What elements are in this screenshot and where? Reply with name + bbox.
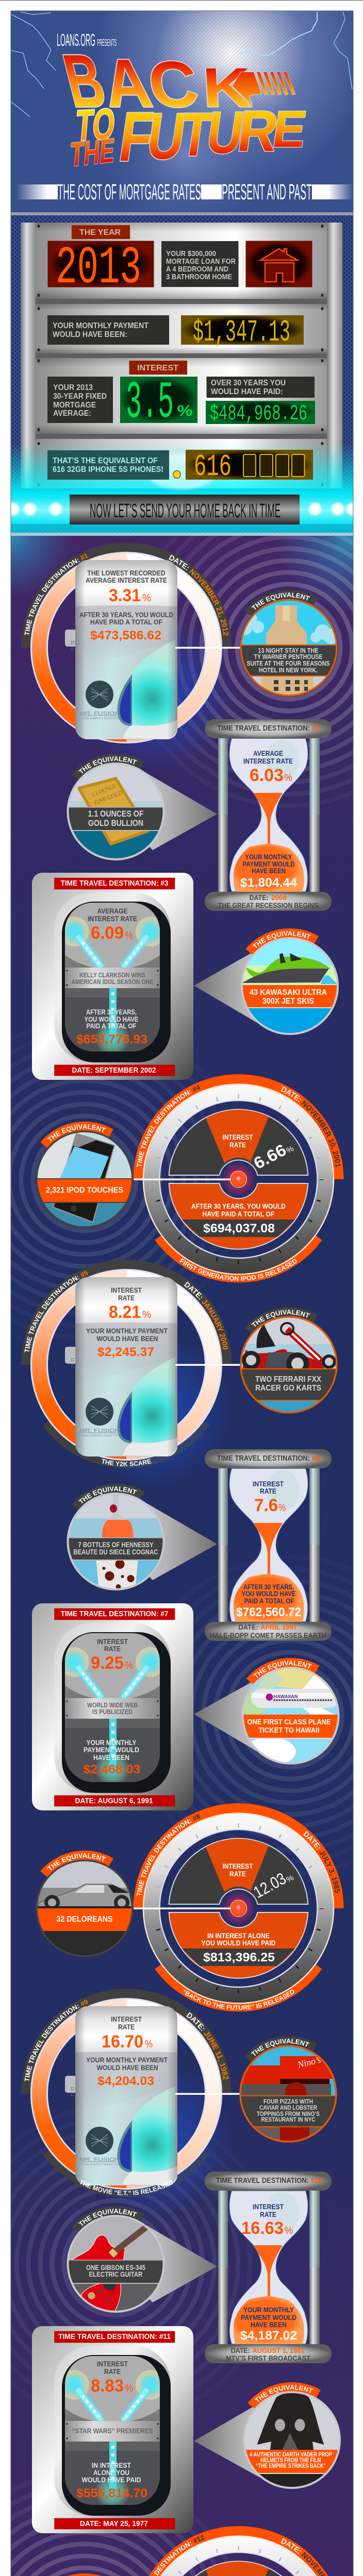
destination 6: hourglass: INTEREST bbox=[253, 1480, 284, 1488]
equivalent 2: gold bullion bbox=[67, 754, 165, 860]
destination 5: Mr. Fusion: WOULD HAVE BEEN bbox=[97, 1334, 158, 1343]
display: interest rate: % bbox=[177, 402, 193, 419]
equivalent 8: deloreans: 32 DELOREANS bbox=[57, 1915, 113, 1924]
equivalent 11: darth vader helmets: 4 AUTHENTIC DARTH VADER PROP bbox=[250, 2452, 332, 2458]
destination 10: hourglass: DATE: bbox=[231, 2346, 250, 2354]
tag: interest bbox=[129, 361, 187, 375]
destination 5: Mr. Fusion: MR. FUSION bbox=[79, 1428, 120, 1434]
destination 2: hourglass: THE GREAT RECESSION BEGINS bbox=[218, 901, 318, 909]
text block: over 30 years: OVER 30 YEARS YOU bbox=[211, 379, 286, 387]
title: Back to the Future: TO bbox=[74, 99, 117, 150]
destination 4: clock: DATE: NOVEMBER 10, 2001 bbox=[280, 1086, 341, 1167]
tag: the year: THE YEAR bbox=[79, 228, 121, 237]
destination 9: Mr. Fusion: 16.70 bbox=[102, 2032, 143, 2052]
destination 10: hourglass: PAYMENT WOULD bbox=[241, 2313, 296, 2321]
destination 4: clock: AFTER 30 YEARS, YOU WOULD bbox=[191, 1202, 286, 1210]
destination 4: clock: INTEREST bbox=[223, 1133, 253, 1141]
destination 10: hourglass: AUGUST 1, 1981 bbox=[253, 2346, 305, 2354]
destination 10: hourglass: YOUR MONTHLY bbox=[243, 2306, 294, 2314]
destination 2: hourglass bbox=[205, 719, 332, 911]
text block: monthly payment: YOUR MONTHLY PAYMENT bbox=[53, 321, 148, 330]
equivalent 9: pizzas: RESTAURANT IN NYC bbox=[261, 2117, 316, 2123]
text block: over 30 years bbox=[206, 377, 315, 398]
destination 6: hourglass: PAID A TOTAL OF bbox=[244, 1597, 294, 1605]
banner: now let's send your home back in time bbox=[70, 495, 300, 524]
display: interest rate: 3.5 bbox=[126, 374, 174, 433]
equivalent 3: jet skis: 300X JET SKIS bbox=[262, 997, 314, 1006]
destination 2: hourglass: $1,804.44 bbox=[240, 876, 298, 890]
equivalent 10: guitar: THE EQUIVALENT bbox=[78, 2209, 137, 2226]
destination 9: Mr. Fusion: THE MOVIE “E.T.” IS RELEASED bbox=[80, 2179, 173, 2195]
destination 7: flux capacitor: PAYMENT WOULD bbox=[84, 1745, 139, 1754]
destination 1: Mr. Fusion: MR. FUSION bbox=[79, 711, 120, 717]
equivalent 1: hotel: TY WARNER PENTHOUSE bbox=[254, 653, 323, 660]
destination 9: Mr. Fusion: 11 12 bbox=[70, 2087, 75, 2097]
destination 6: hourglass: $762,560.72 bbox=[236, 1605, 301, 1619]
equivalent 7: plane ticket: ONE FIRST CLASS PLANE bbox=[248, 1718, 331, 1726]
equivalent 9: pizzas: FOUR PIZZAS WITH bbox=[263, 2099, 313, 2105]
destination 2: hourglass: % bbox=[284, 772, 292, 784]
destination 4: clock: 6.66 bbox=[251, 1140, 289, 1173]
presenter line bbox=[57, 30, 117, 49]
equivalent 7: plane ticket bbox=[241, 1658, 339, 1765]
destination 1: Mr. Fusion: 11 12 bbox=[70, 640, 75, 651]
destination 6: hourglass: YOU WOULD HAVE bbox=[241, 1589, 296, 1598]
destination 2: hourglass: AVERAGE bbox=[253, 749, 283, 757]
destination 7: flux capacitor: HAVE BEEN bbox=[93, 1753, 129, 1761]
destination 5: Mr. Fusion: TIME TRAVEL DESTINATION: #5 bbox=[25, 1270, 88, 1352]
destination 7: flux capacitor: $2,468.03 bbox=[84, 1762, 140, 1776]
equivalent 9: pizzas bbox=[239, 2036, 337, 2143]
destination 3: flux capacitor: YOU WOULD HAVE bbox=[85, 1015, 138, 1023]
destination 5: Mr. Fusion: THE Y2K SCARE bbox=[102, 1459, 152, 1466]
destination 7: flux capacitor: IS PUBLICIZED bbox=[92, 1708, 133, 1716]
equivalent 6: cognac bbox=[67, 1484, 165, 1590]
text block: mortgage loan: A 4 BEDROOM AND bbox=[166, 265, 228, 274]
destination 7: flux capacitor: 9.25 bbox=[91, 1653, 124, 1673]
destination 3: flux capacitor: INTEREST RATE bbox=[88, 914, 137, 923]
destination 6: hourglass: % bbox=[278, 1502, 286, 1514]
equivalent 2: gold bullion: GOLD BULLION bbox=[88, 818, 143, 828]
text block: mortgage loan: 3 BATHROOM HOME bbox=[166, 273, 232, 281]
equivalent 5: go karts bbox=[240, 1307, 338, 1414]
destination 3: flux capacitor: AVERAGE bbox=[97, 907, 128, 915]
destination 6: hourglass: 7.6 bbox=[254, 1496, 278, 1515]
destination 5: Mr. Fusion: $2,245.37 bbox=[97, 1345, 154, 1359]
destination 6: hourglass: DATE: bbox=[238, 1623, 258, 1631]
destination 9: Mr. Fusion: WOULD HAVE BEEN bbox=[97, 2063, 158, 2072]
destination 4: clock: FIRST GENERATION IPOD IS RELEASED bbox=[179, 1258, 297, 1281]
text block: 2013 average: AVERAGE: bbox=[53, 409, 91, 418]
page frame bbox=[0, 0, 363, 1]
text block: 2013 average: MORTGAGE bbox=[53, 401, 96, 410]
destination 4: clock bbox=[134, 1079, 342, 1282]
equivalent 8: deloreans bbox=[36, 1851, 134, 1957]
glowing light band bbox=[7, 496, 359, 536]
destination 3: flux capacitor bbox=[32, 873, 193, 1080]
equivalent 4: ipod touches: THE EQUIVALENT bbox=[47, 1124, 106, 1142]
destination 7: flux capacitor: DATE: AUGUST 6, 1991 bbox=[75, 1797, 153, 1805]
destination 5: Mr. Fusion: 11 12 bbox=[70, 1358, 75, 1368]
equivalent 2: gold bullion: FINE GOLD bbox=[93, 789, 124, 807]
destination 8: clock: INTEREST bbox=[223, 1862, 253, 1870]
destination 1: Mr. Fusion: HAVE PAID A TOTAL OF bbox=[90, 618, 162, 626]
destination 1: Mr. Fusion: THE LOWEST RECORDED bbox=[88, 569, 165, 577]
equivalent 8: deloreans: THE EQUIVALENT bbox=[47, 1853, 106, 1870]
destination 5: Mr. Fusion: INTEREST bbox=[111, 1286, 142, 1294]
display: monthly payment bbox=[181, 315, 304, 350]
destination 11: flux capacitor: ALONE YOU bbox=[93, 2468, 129, 2477]
equivalent 5: go karts: TWO FERRARI FXX bbox=[255, 1375, 322, 1384]
destination 7: flux capacitor: INTEREST bbox=[97, 1637, 128, 1646]
display: iphone count bbox=[186, 450, 313, 484]
text: PRESENTS bbox=[97, 38, 117, 48]
destination 3: flux capacitor: AFTER 30 YEARS, bbox=[86, 1008, 137, 1016]
destination 4: clock: % bbox=[285, 1144, 295, 1156]
destination 9: Mr. Fusion: HOME ENERGY REACTOR bbox=[79, 2163, 120, 2166]
destination 3: flux capacitor: DATE: SEPTEMBER 2002 bbox=[72, 1066, 156, 1075]
destination 10: hourglass: RATE bbox=[260, 2210, 276, 2218]
destination 8: clock: TIME TRAVEL DESTINATION: #8 bbox=[137, 1814, 200, 1896]
equivalent 5: go karts: THE EQUIVALENT bbox=[252, 1310, 310, 1327]
equivalent 11: darth vader helmets: THE EQUIVALENT bbox=[255, 2385, 314, 2402]
icon: house display bbox=[246, 241, 312, 287]
equivalent 2: gold bullion: 1.1 OUNCE bbox=[90, 782, 117, 799]
display: monthly payment: $1,347.13 bbox=[193, 315, 290, 350]
destination 6: hourglass: RATE bbox=[260, 1487, 276, 1495]
destination 5: Mr. Fusion: HOME ENERGY REACTOR bbox=[79, 1434, 120, 1437]
text block: iphone equivalent bbox=[47, 450, 169, 480]
destination 9: Mr. Fusion: DATE: JUNE 11, 1982 bbox=[186, 2012, 228, 2080]
equivalent 10: guitar bbox=[67, 2206, 165, 2313]
title: Back to the Future: R bbox=[234, 99, 282, 164]
destination 5: Mr. Fusion: 8.21 bbox=[109, 1302, 141, 1322]
destination 1: Mr. Fusion: DATE: NOVEMBER 21, 2012 bbox=[169, 554, 229, 636]
equivalent 10: guitar: ELECTRIC GUITAR bbox=[89, 2270, 143, 2278]
destination 5: Mr. Fusion: % bbox=[142, 1309, 151, 1320]
destination 2: hourglass: 2008 bbox=[271, 893, 287, 902]
equivalent 6: cognac: BEAUTE DU SIECLE COGNAC bbox=[73, 1548, 158, 1556]
destination 12: clock bbox=[134, 2531, 342, 2576]
destination 6: hourglass: #6 bbox=[312, 1454, 320, 1463]
title: Back to the Future: B bbox=[56, 39, 113, 123]
destination 11: flux capacitor: % bbox=[125, 2383, 133, 2394]
connector: flux 11 to helmets bbox=[194, 2407, 292, 2479]
destination 7: flux capacitor: YOUR MONTHLY bbox=[87, 1738, 137, 1747]
destination 3: flux capacitor: KELLY CLARKSON WINS bbox=[79, 972, 145, 979]
destination 11: flux capacitor: WOULD HAVE PAID bbox=[81, 2476, 141, 2484]
equivalent 9: pizzas: CAVIAR AND LOBSTER bbox=[259, 2105, 318, 2111]
display: total paid: $484,968.26 bbox=[210, 401, 307, 426]
text block: mortgage loan: YOUR $300,000 bbox=[166, 249, 216, 258]
destination 7: flux capacitor: WORLD WIDE WEB bbox=[87, 1702, 138, 1709]
destination 1: Mr. Fusion: 3.31 bbox=[109, 586, 141, 605]
destination 7: flux capacitor: % bbox=[125, 1660, 133, 1671]
title: Back to the Future: E bbox=[269, 100, 310, 158]
equivalent 2: gold bullion: THE EQUIVALENT bbox=[78, 756, 137, 774]
destination 1: Mr. Fusion: TIME TRAVEL DESTINATION: #1 bbox=[25, 553, 89, 635]
connector: flux 3 to jet skis bbox=[194, 953, 289, 1025]
destination 9: Mr. Fusion bbox=[23, 1994, 240, 2218]
connector: cognac to hourglass 6 bbox=[116, 1501, 217, 1580]
destination 1: Mr. Fusion: AFTER 30 YEARS, YOU WOULD bbox=[79, 611, 173, 619]
equivalent 3: jet skis: THE EQUIVALENT bbox=[253, 931, 311, 948]
equivalent 5: go karts: RACER GO KARTS bbox=[255, 1384, 321, 1393]
header background bbox=[11, 11, 353, 212]
text block: mortgage loan bbox=[161, 241, 238, 287]
destination 8: clock: 12.03 bbox=[250, 1869, 289, 1902]
presenter line: LOANS.ORG bbox=[57, 30, 95, 49]
equivalent 1: hotel: SUITE AT THE FOUR SEASONS bbox=[246, 660, 330, 667]
connector: flux 7 to plane ticket bbox=[194, 1682, 289, 1754]
destination 9: Mr. Fusion: RATE bbox=[118, 2023, 135, 2031]
destination 4: clock: HAVE PAID A TOTAL OF bbox=[202, 1210, 275, 1218]
equivalent 10: guitar: ONE GIBSON ES-345 bbox=[86, 2264, 145, 2272]
equivalent 2: gold bullion: 1.1 OUNCES OF bbox=[88, 809, 143, 819]
destination 5: Mr. Fusion bbox=[23, 1265, 240, 1489]
destination 9: Mr. Fusion: TIME TRAVEL DESTINATION: #9 bbox=[25, 1999, 88, 2081]
equivalent 4: ipod touches bbox=[36, 1122, 134, 1228]
destination 5: Mr. Fusion: YOUR MONTHLY PAYMENT bbox=[86, 1327, 168, 1335]
display: year 2013: 2013 bbox=[56, 238, 141, 298]
destination 8: clock: DATE: JULY 3, 1985 bbox=[303, 1831, 340, 1893]
equivalent 1: hotel: THE EQUIVALENT bbox=[252, 592, 310, 610]
destination 11: flux capacitor: IN INTEREST bbox=[92, 2461, 131, 2469]
destination 5: Mr. Fusion: RATE bbox=[118, 1294, 135, 1302]
destination 5: Mr. Fusion: DATE: JANUARY 2000 bbox=[184, 1282, 228, 1350]
destination 1: Mr. Fusion: $473,586.62 bbox=[90, 629, 161, 642]
cyan glow overlay bbox=[11, 443, 353, 496]
destination 8: clock: “BACK TO THE FUTURE” IS RELEASED bbox=[184, 1989, 294, 2010]
destination 9: Mr. Fusion: $4,204.03 bbox=[97, 2074, 154, 2088]
destination 8: clock: $813,396.25 bbox=[203, 1951, 275, 1964]
destination 1: Mr. Fusion bbox=[23, 548, 240, 772]
destination 10: hourglass: % bbox=[285, 2225, 293, 2236]
title: Back to the Future bbox=[56, 39, 310, 176]
text block: iphone equivalent: THAT’S THE EQUIVALENT OF bbox=[53, 456, 158, 465]
destination 11: flux capacitor: TIME TRAVEL DESTINATION: #11 bbox=[58, 2332, 171, 2341]
destination 6: hourglass: AFTER 30 YEARS, bbox=[243, 1583, 294, 1591]
destination 3: flux capacitor: AMERICAN IDOL SEASON ONE bbox=[71, 978, 154, 986]
equivalent 7: plane ticket: THE EQUIVALENT bbox=[253, 1660, 312, 1677]
destination 7: flux capacitor bbox=[32, 1603, 193, 1810]
destination 3: flux capacitor: TIME TRAVEL DESTINATION: #3 bbox=[61, 879, 168, 888]
destination 11: flux capacitor: 8.83 bbox=[91, 2376, 124, 2396]
equivalent 7: plane ticket: TICKET TO HAWAII bbox=[259, 1726, 320, 1735]
destination 10: hourglass: $4,187.02 bbox=[240, 2329, 297, 2343]
destination 10: hourglass: INTEREST bbox=[253, 2202, 284, 2211]
title: Back to the Future: K bbox=[201, 57, 253, 118]
destination 2: hourglass: 6.03 bbox=[250, 766, 284, 785]
equivalent 6: cognac: THE EQUIVALENT bbox=[78, 1486, 137, 1503]
text block: monthly payment bbox=[47, 315, 169, 345]
destination 4: clock: TIME TRAVEL DESTINATION: #4 bbox=[137, 1085, 200, 1167]
panel: the year machine bbox=[11, 212, 353, 536]
equivalent 9: pizzas: TOPPINGS FROM NINO’S bbox=[257, 2111, 320, 2117]
destination 9: Mr. Fusion: % bbox=[145, 2039, 153, 2050]
destination 10: hourglass: MTV’S FIRST BROADCAST bbox=[226, 2354, 310, 2362]
destination 11: flux capacitor: “STAR WARS” PREMIERES bbox=[72, 2427, 153, 2435]
tag: the year bbox=[72, 225, 130, 239]
destination 9: Mr. Fusion: YOUR MONTHLY PAYMENT bbox=[86, 2056, 168, 2064]
destination 9: Mr. Fusion: MR. FUSION bbox=[79, 2157, 120, 2163]
destination 2: hourglass: DATE: bbox=[250, 893, 268, 902]
destination 2: hourglass: INTEREST RATE bbox=[243, 757, 293, 765]
equivalent 11: darth vader helmets: “THE EMPIRE STRIKES BACK” bbox=[256, 2463, 326, 2469]
destination 6: hourglass: APRIL 1997 bbox=[260, 1623, 297, 1631]
destination 11: flux capacitor bbox=[32, 2326, 193, 2533]
destination 11: flux capacitor: RATE bbox=[104, 2367, 121, 2376]
text block: 2013 average: 30-YEAR FIXED bbox=[53, 392, 107, 401]
destination 8: clock: % bbox=[285, 1873, 295, 1885]
destination 6: hourglass bbox=[205, 1449, 332, 1641]
title: Back to the Future: U bbox=[203, 100, 248, 166]
text block: mortgage loan: MORTAGE LOAN FOR bbox=[166, 257, 236, 266]
text block: 2013 average bbox=[47, 377, 113, 423]
destination 10: hourglass: #10 bbox=[311, 2176, 322, 2185]
destination 8: clock: RATE bbox=[229, 1870, 246, 1878]
title: Back to the Future: F bbox=[115, 98, 157, 176]
destination 8: clock: YOU WOULD HAVE PAID bbox=[201, 1939, 275, 1947]
lightning bolts bbox=[11, 12, 352, 117]
display: iphone count: 616 bbox=[194, 450, 232, 484]
connector: guitar to hourglass 10 bbox=[116, 2224, 217, 2302]
destination 2: hourglass: #2 bbox=[312, 724, 320, 733]
equivalent 9: pizzas: THE EQUIVALENT bbox=[251, 2039, 309, 2056]
equivalent 6: cognac: 7 BOTTLES OF HENNESSY bbox=[78, 1541, 154, 1549]
destination 3: flux capacitor: $653,776.93 bbox=[76, 1032, 147, 1046]
destination 2: hourglass: PAYMENT WOULD bbox=[242, 860, 295, 868]
destination 8: clock bbox=[134, 1808, 341, 2011]
equivalent 11: darth vader helmets bbox=[243, 2382, 341, 2489]
destination 2: hourglass: TIME TRAVEL DESTINATION: bbox=[217, 724, 310, 733]
destination 3: flux capacitor: % bbox=[125, 930, 133, 941]
destination 1: Mr. Fusion: % bbox=[142, 592, 151, 604]
destination 9: Mr. Fusion: INTEREST bbox=[111, 2015, 142, 2023]
equivalent 11: darth vader helmets: HELMETS FROM THE FILM bbox=[260, 2458, 321, 2464]
tag: interest: INTEREST bbox=[137, 364, 179, 372]
equivalent 3: jet skis: 43 KAWASAKI ULTRA bbox=[250, 988, 327, 997]
destination 4: clock: $694,037.08 bbox=[203, 1222, 275, 1235]
equivalent 4: ipod touches: 2,321 IPOD TOUCHES bbox=[46, 1186, 123, 1195]
connector: gold to hourglass 2 bbox=[116, 771, 217, 850]
destination 10: hourglass bbox=[205, 2172, 332, 2363]
destination 7: flux capacitor: TIME TRAVEL DESTINATION: #7 bbox=[61, 1609, 168, 1618]
title: Back to the Future: U bbox=[143, 100, 190, 173]
text block: over 30 years: WOULD HAVE PAID: bbox=[211, 387, 283, 396]
destination 10: hourglass: TIME TRAVEL DESTINATION: bbox=[216, 2176, 309, 2185]
destination 2: hourglass: HAVE BEEN bbox=[252, 867, 286, 875]
equivalent 1: hotel bbox=[240, 590, 338, 697]
text block: 2013 average: YOUR 2013 bbox=[53, 383, 93, 392]
led indicator bbox=[173, 471, 180, 478]
destination 8: clock: IN INTEREST ALONE bbox=[207, 1931, 270, 1940]
destination 11: flux capacitor: INTEREST bbox=[97, 2360, 128, 2368]
equivalent 7: plane ticket: HAWAIIAN bbox=[273, 1694, 298, 1699]
destination 7: flux capacitor: RATE bbox=[104, 1645, 121, 1653]
destination 11: flux capacitor: $555,814.70 bbox=[76, 2486, 147, 2500]
destination 3: flux capacitor: PAID A TOTAL OF bbox=[87, 1022, 137, 1030]
equivalent 9: pizzas: Nino’s bbox=[296, 2054, 322, 2070]
title: Back to the Future: T bbox=[176, 100, 216, 168]
destination 2: hourglass: YOUR MONTHLY bbox=[245, 853, 292, 861]
destination 6: hourglass: TIME TRAVEL DESTINATION: bbox=[217, 1454, 310, 1463]
destination 1: Mr. Fusion: HOME ENERGY REACTOR bbox=[79, 717, 120, 720]
text block: monthly payment: WOULD HAVE BEEN: bbox=[53, 330, 127, 339]
destination 11: flux capacitor: DATE: MAY 25, 1977 bbox=[80, 2519, 148, 2528]
destination 6: hourglass: HALE-BOPP COMET PASSES EARTH bbox=[210, 1631, 326, 1639]
destination 10: hourglass: 16.63 bbox=[241, 2218, 284, 2238]
title: Back to the Future: THE bbox=[69, 131, 116, 174]
destination 1: Mr. Fusion: AVERAGE INTEREST RATE bbox=[86, 576, 167, 584]
destination 10: hourglass: HAVE BEEN bbox=[251, 2320, 287, 2329]
equivalent 1: hotel: 13 NIGHT STAY IN THE bbox=[258, 647, 319, 654]
title: Back to the Future: A bbox=[98, 46, 157, 122]
equivalent 3: jet skis bbox=[241, 928, 339, 1035]
destination 4: clock: RATE bbox=[229, 1141, 246, 1149]
text block: iphone equivalent: 616 32GB IPHONE 5S PHONES! bbox=[53, 465, 163, 474]
destination 3: flux capacitor: 6.09 bbox=[91, 923, 124, 943]
equivalent 1: hotel: HOTEL IN NEW YORK. bbox=[259, 667, 318, 674]
title: Back to the Future: C bbox=[144, 48, 203, 121]
